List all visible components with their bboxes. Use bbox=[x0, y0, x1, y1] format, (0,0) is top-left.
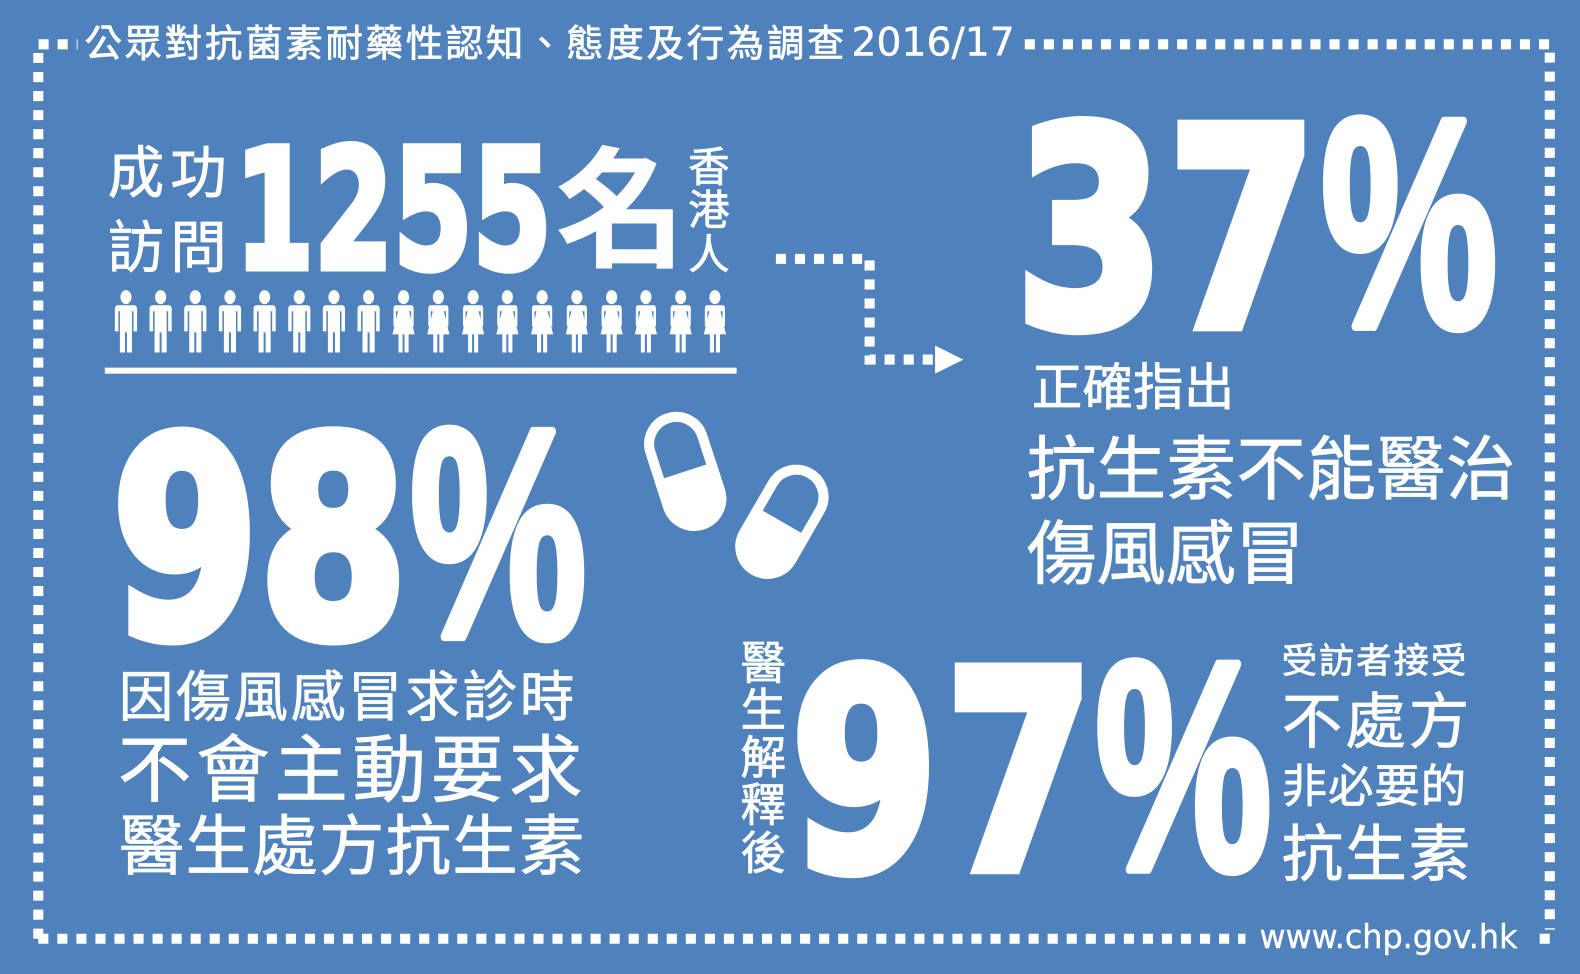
number: 37%: % bbox=[1321, 57, 1497, 390]
number: 37%: 3 bbox=[1016, 71, 1164, 390]
text: 成功訪問: 訪問 bbox=[108, 216, 227, 279]
text: 名: 名 bbox=[555, 138, 686, 285]
text: 醫生解釋後: 生 bbox=[741, 685, 786, 736]
icon: pill left bbox=[637, 408, 735, 539]
text: 成功訪問 bbox=[108, 141, 227, 279]
panel: 98% bbox=[112, 367, 586, 883]
panel: 1255 respondents bbox=[105, 114, 737, 374]
text: 因傷風感冒求診時: 因傷風感冒求診時 bbox=[119, 667, 574, 728]
text: 不會主動要求: 不會主動要求 bbox=[118, 729, 582, 812]
divider line bbox=[105, 368, 737, 374]
text: 醫生處方抗生素: 醫生處方抗生素 bbox=[119, 810, 584, 883]
text: 抗生素不能醫治: 抗生素不能醫治 bbox=[1027, 431, 1516, 509]
number: 37% bbox=[1016, 57, 1497, 390]
number: 97%: 7 bbox=[945, 614, 1094, 933]
title: 公眾對抗菌素耐藥性認知、態度及行為調查 bbox=[85, 22, 844, 64]
number: 97% bbox=[791, 600, 1272, 933]
text: 醫生解釋後: 醫 bbox=[741, 638, 786, 689]
number: 97%: % bbox=[1095, 600, 1272, 933]
panel: 97% bbox=[741, 600, 1470, 933]
panel: 37% bbox=[1016, 57, 1516, 593]
text: 成功訪問: 成功 bbox=[108, 141, 227, 204]
title: 2016/17 bbox=[851, 20, 1015, 65]
text: 不處方: 不處方 bbox=[1282, 687, 1469, 755]
url: www.chp.gov.hk bbox=[1260, 917, 1518, 956]
text: 正確指出: 正確指出 bbox=[1032, 359, 1234, 416]
text: 非必要的: 非必要的 bbox=[1282, 761, 1466, 812]
icon: pills bbox=[637, 408, 838, 591]
text: 傷風感冒: 傷風感冒 bbox=[1027, 515, 1305, 593]
text: 抗生素: 抗生素 bbox=[1282, 820, 1470, 889]
number: 98%: 8 bbox=[259, 381, 408, 700]
text: 香港人: 香 bbox=[688, 144, 730, 190]
number: 98%: % bbox=[410, 367, 586, 700]
number: 37%: 7 bbox=[1168, 71, 1317, 390]
number: 98%: 9 bbox=[112, 381, 259, 701]
text: 醫生解釋後: 後 bbox=[741, 828, 786, 879]
text: 香港人 bbox=[688, 144, 730, 278]
text: 醫生解釋後: 釋 bbox=[741, 780, 786, 831]
number: 1255: 1255 bbox=[235, 114, 552, 308]
text: 香港人: 人 bbox=[688, 232, 730, 278]
number: 97%: 9 bbox=[791, 614, 938, 933]
number: 98% bbox=[112, 367, 586, 701]
icon row: people bbox=[115, 290, 726, 353]
text: 醫生解釋後: 解 bbox=[741, 733, 786, 784]
text: 香港人: 港 bbox=[688, 188, 730, 234]
icon: pill right bbox=[724, 457, 838, 591]
text: 醫生解釋後 bbox=[741, 638, 786, 879]
arrow: dotted connector bbox=[776, 259, 963, 374]
text: 受訪者接受: 受訪者接受 bbox=[1282, 642, 1466, 681]
